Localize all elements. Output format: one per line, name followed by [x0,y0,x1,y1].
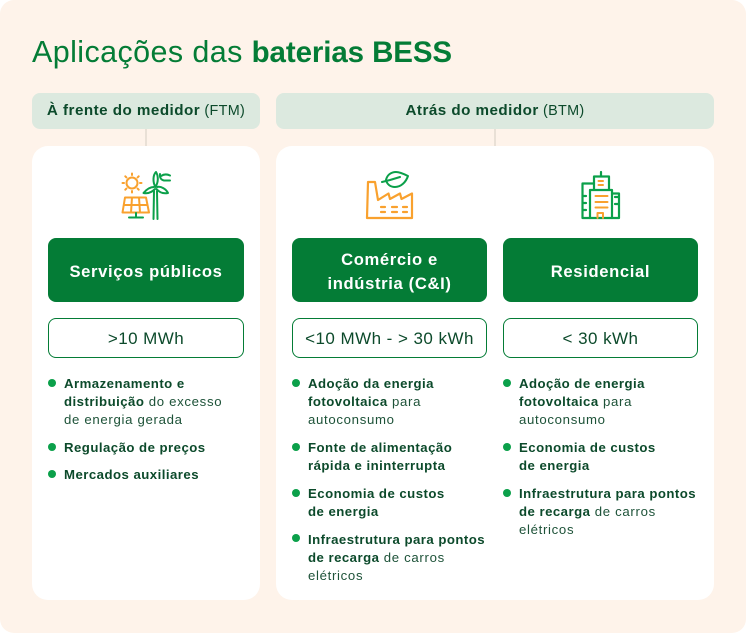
box: Residencial: Residencial [551,262,650,280]
icon: factory with leaf [366,171,414,220]
list: commerce and industry: Fonte de alimentação [308,440,452,455]
list: commerce and industry: de energia [308,504,379,519]
capacity: FTM: >10 MWh [108,329,184,348]
header: FTM: À frente do medidor (FTM) [47,102,245,119]
list: commerce and industry [292,376,485,583]
list: residential: Economia de custos [519,440,656,455]
header: FTM [32,93,260,129]
capacity: residential: < 30 kWh [563,329,638,348]
box: Residencial [503,238,698,302]
list: utilities: Regulação de preços [64,440,206,455]
list: commerce and industry: elétricos [308,568,363,583]
list: residential: Adoção de energia [519,376,645,391]
header: BTM [276,93,714,129]
panel: FTM [32,146,260,600]
capacity: C&I [292,318,487,358]
panel: BTM [276,146,714,600]
box: Serviços públicos: Serviços públicos [69,262,223,280]
list: commerce and industry: de recarga de carros [308,550,445,565]
icon: sun, solar panel and wind turbine [122,171,171,220]
capacity: FTM [48,318,244,358]
list: utilities: distribuição do excesso [64,394,222,409]
connector FTM [145,129,147,146]
title: Aplicações das baterias BESS [32,35,452,69]
capacity: residential [503,318,698,358]
box: Comércio e indústria: Comércio e [341,250,438,268]
box: Comércio e indústria [292,238,487,302]
list: residential: autoconsumo [519,412,606,427]
box: Serviços públicos [48,238,244,302]
box: Comércio e indústria: indústria (C&I) [327,274,452,292]
list: residential: elétricos [519,522,574,537]
list: utilities [48,376,222,482]
list: commerce and industry: Economia de custos [308,486,445,501]
list: residential: Infraestrutura para pontos [519,486,696,501]
list: utilities: de energia gerada [64,412,183,427]
list: utilities: Mercados auxiliares [64,467,199,482]
list: commerce and industry: autoconsumo [308,412,395,427]
list: commerce and industry: fotovoltaica para [308,394,421,409]
list: commerce and industry: rápida e ininterrupta [308,458,445,473]
list: utilities: Armazenamento e [64,376,185,391]
list: commerce and industry: Adoção da energia [308,376,434,391]
icon: buildings [581,170,620,220]
header: BTM: Atrás do medidor (BTM) [405,102,585,119]
list: residential: de energia [519,458,590,473]
connector BTM [494,129,496,146]
capacity: C&I: <10 MWh - > 30 kWh [305,329,474,348]
list: commerce and industry: Infraestrutura para pontos [308,532,485,547]
list: residential: de recarga de carros [519,504,656,519]
list: residential: fotovoltaica para [519,394,632,409]
list: residential [503,376,696,537]
